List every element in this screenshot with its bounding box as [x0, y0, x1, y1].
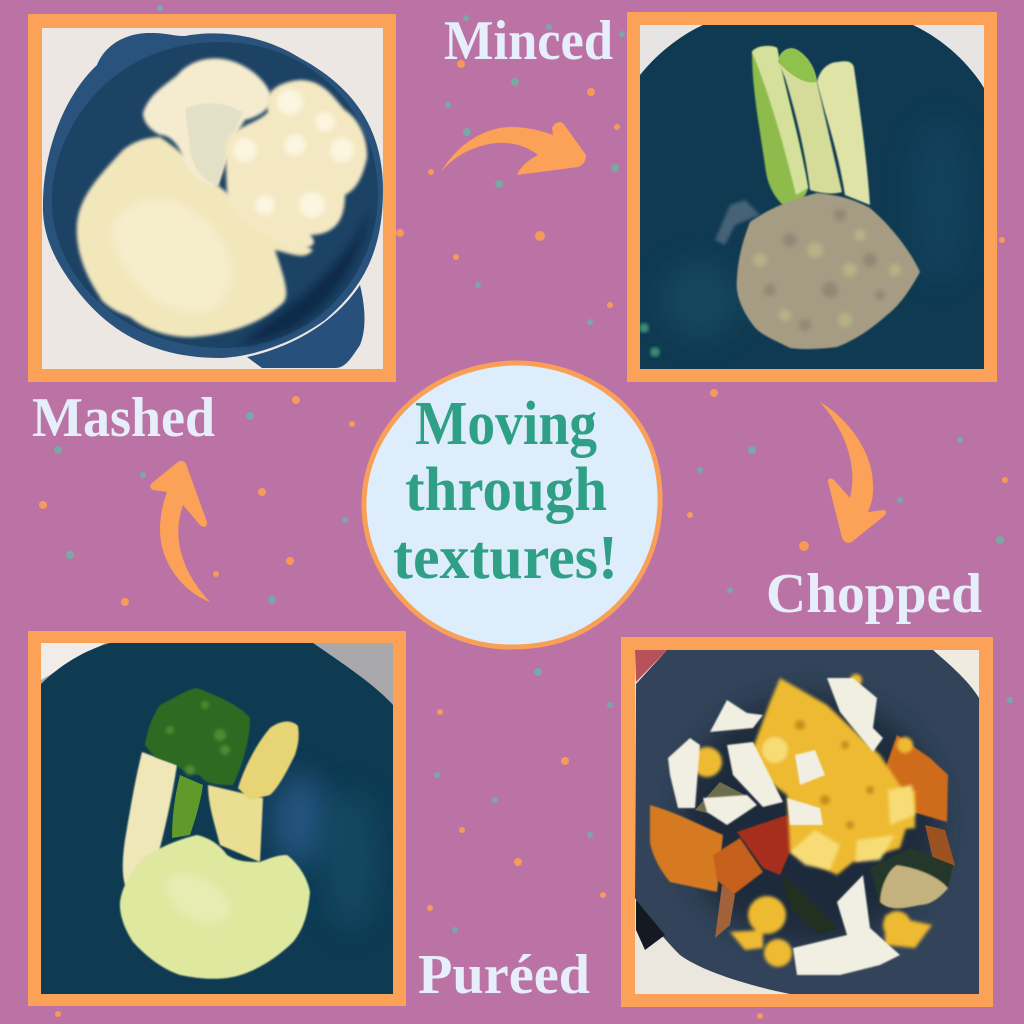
title: Moving: [415, 390, 597, 458]
broccoli head: [145, 688, 250, 785]
label: Mashed: Mashed: [32, 387, 215, 449]
cauliflower floret left: [143, 58, 272, 186]
arrow: minced to chopped: [820, 402, 886, 543]
label: Puréed: Puréed: [418, 944, 590, 1006]
egg yolk crumble: [692, 674, 932, 967]
potato sticks: [123, 752, 177, 885]
puree: [120, 835, 310, 979]
label: Chopped: Chopped: [766, 563, 982, 625]
title: textures!: [393, 524, 618, 592]
panel: mashed photo: [28, 14, 396, 382]
zucchini pieces: [870, 848, 953, 905]
label: Minced: Minced: [444, 10, 613, 72]
panel: minced photo: [627, 12, 997, 382]
potato wedge: [238, 722, 299, 800]
panel: pureed photo: [28, 631, 406, 1006]
title: through: [405, 456, 607, 524]
mashed cauliflower: [77, 137, 313, 337]
zucchini sticks: [752, 46, 808, 208]
minced food: [737, 193, 920, 349]
squash and tomato: [650, 805, 723, 892]
center badge: [364, 363, 660, 647]
broccoli stem: [172, 775, 203, 838]
arrow: puréed to mashed: [150, 461, 210, 602]
arrow: mashed to minced: [441, 122, 586, 175]
egg white pieces: [668, 678, 900, 975]
panel: chopped photo: [621, 637, 993, 1007]
cauliflower floret right: [225, 80, 367, 248]
